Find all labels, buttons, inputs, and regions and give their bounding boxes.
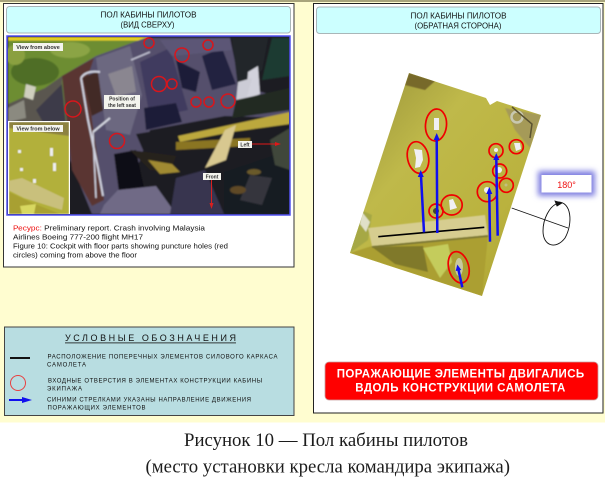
panel heading: reverse side: ПОЛ КАБИНЫ ПИЛОТОВ: [410, 12, 506, 20]
rotation label: 180 degrees: [538, 171, 595, 196]
legend heading: УСЛОВНЫЕ ОБОЗНАЧЕНИЯ: [65, 333, 236, 343]
figure caption: (место установки кресла командира экипажа): [146, 458, 510, 478]
photo tag and arrow: left: Left: [240, 142, 250, 148]
rotation axis and arrow: [512, 201, 570, 245]
panel heading: view from above: ПОЛ КАБИНЫ ПИЛОТОВ: [100, 10, 196, 20]
bolt at the panel corner: [512, 107, 532, 138]
rotation label: 180 degrees: 180°: [557, 180, 576, 190]
photo tag: position of the left seat: [104, 95, 140, 109]
photo tag: position of the left seat: Position of: [109, 96, 135, 102]
figure caption: [146, 431, 510, 478]
legend item: red circle: [10, 376, 262, 392]
legend item: black line: САМОЛЕТА: [47, 362, 86, 368]
legend item: blue arrow: [9, 397, 251, 412]
photo tag: position of the left seat: the left seat: [108, 103, 136, 109]
panel: cockpit floor, reverse side: [314, 4, 603, 413]
legend item: red circle: ВХОДНЫЕ ОТВЕРСТИЯ В ЭЛЕМЕНТАХ КОНСТРУКЦИИ КАБИНЫ: [48, 378, 262, 384]
legend item: blue arrow: ПОРАЖАЮЩИХ ЭЛЕМЕНТОВ: [48, 406, 146, 412]
source text block: circles) coming from above the floor: [13, 250, 138, 260]
photo tag and arrow: left: [238, 141, 281, 148]
legend item: black line: [10, 354, 278, 368]
panel heading: reverse side: [316, 7, 600, 34]
inset photo: view from below: [8, 121, 70, 215]
photo tag and arrow: front: [203, 173, 221, 209]
puncture holes: [414, 118, 521, 276]
blue arrows: direction of fragment travel: [418, 133, 499, 287]
red hole markers on the photo: [65, 38, 235, 148]
legend item: black line: РАСПОЛОЖЕНИЕ ПОПЕРЕЧНЫХ ЭЛЕМЕНТОВ СИЛОВОГО КАРКАСА: [48, 354, 278, 360]
legend item: red circle: ЭКИПАЖА: [47, 386, 82, 392]
callout: fragments moved along the aircraft structure: ПОРАЖАЮЩИЕ ЭЛЕМЕНТЫ ДВИГАЛИСЬ: [337, 368, 584, 380]
photo tag: view from above: View from above: [16, 45, 60, 51]
photo: wreckage view from above: [5, 36, 290, 215]
panel: legend: [4, 327, 294, 416]
source text block: [13, 224, 228, 260]
photo tag and arrow: front: Front: [206, 174, 219, 180]
panel heading: view from above: (ВИД СВЕРХУ): [120, 20, 175, 30]
panel: cockpit floor, view from above: [4, 4, 294, 267]
callout: fragments moved along the aircraft structure: ВДОЛЬ КОНСТРУКЦИИ САМОЛЕТА: [355, 382, 565, 394]
legend item: blue arrow: СИНИМИ СТРЕЛКАМИ УКАЗАНЫ НАПРАВЛЕНИЕ ДВИЖЕНИЯ: [47, 398, 251, 404]
black line: transverse frame element: [378, 227, 484, 237]
photo tag: view from below: View from below: [16, 126, 60, 132]
photo: rotated underside of the floor panel: [340, 73, 541, 296]
source text block: Airlines Boeing 777-200 flight MH17: [13, 232, 143, 242]
red hole markers on the floor panel: [404, 108, 523, 285]
photo tag: view from below: [13, 125, 63, 132]
source text block: Figure 10: Cockpit with floor parts showing puncture holes (red: [13, 242, 228, 250]
source text block: Ресурс: Preliminary report. Crash involving Malaysia: [13, 224, 206, 232]
callout: fragments moved along the aircraft structure: [325, 362, 598, 400]
photo tag: view from above: [13, 43, 63, 51]
panel heading: view from above: [6, 6, 290, 33]
panel heading: reverse side: (ОБРАТНАЯ СТОРОНА): [414, 22, 502, 30]
figure caption: Рисунок 10 — Пол кабины пилотов: [184, 431, 468, 451]
